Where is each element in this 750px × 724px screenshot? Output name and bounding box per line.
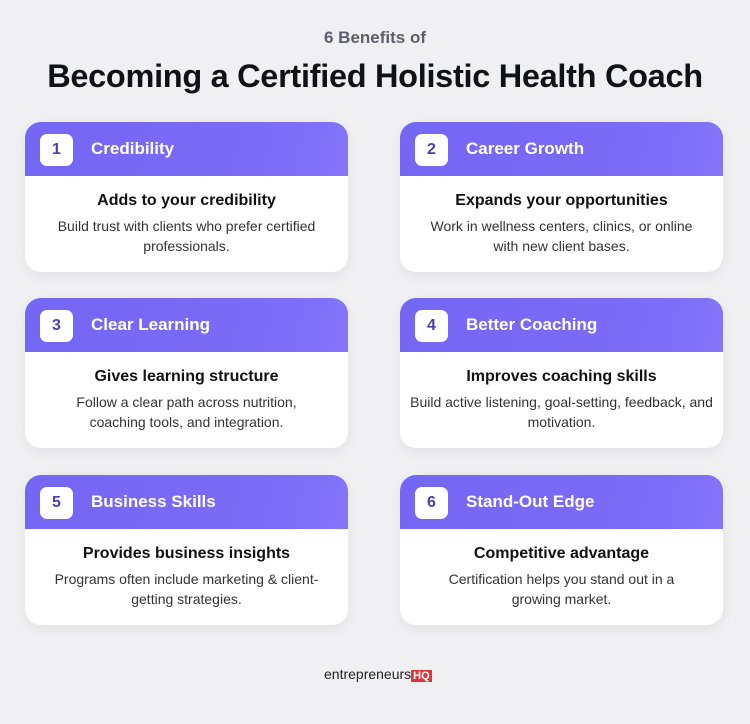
panel: better coaching: 4 xyxy=(427,317,436,334)
title: Becoming a Certified Holistic Health Coach xyxy=(47,58,703,94)
panel: career growth: Work in wellness centers, clinics, or online with new client bases. xyxy=(431,218,692,254)
panel: career growth: Expands your opportunities xyxy=(455,192,668,209)
subtitle: 6 Benefits of xyxy=(324,28,426,47)
panel: business skills xyxy=(25,475,348,625)
panel: business skills: Business Skills xyxy=(91,492,216,511)
panel: credibility: Build trust with clients who prefer certified professionals. xyxy=(58,218,315,254)
panel: credibility: Adds to your credibility xyxy=(97,192,276,209)
panel: better coaching: Better Coaching xyxy=(466,315,597,334)
panel: career growth: 2 xyxy=(427,141,436,158)
panel: stand-out edge xyxy=(400,475,723,625)
panel: stand-out edge: Certification helps you stand out in a growing market. xyxy=(449,571,674,607)
panel: stand-out edge: Competitive advantage xyxy=(474,545,649,562)
panel: stand-out edge: 6 xyxy=(427,494,436,511)
panel: clear learning: Gives learning structure xyxy=(94,368,279,385)
panel: business skills: 5 xyxy=(52,494,61,511)
panel: clear learning xyxy=(25,298,348,448)
panel: career growth xyxy=(400,122,723,272)
logo: entrepreneursHQ xyxy=(324,666,430,682)
panel: credibility: 1 xyxy=(52,141,61,158)
panel: stand-out edge: Stand-Out Edge xyxy=(466,492,594,511)
panel: credibility: Credibility xyxy=(91,139,174,158)
panel: clear learning: Follow a clear path across nutrition, coaching tools, and integration. xyxy=(76,394,297,430)
panel: better coaching: Build active listening, goal-setting, feedback, and motivation. xyxy=(410,394,713,430)
panel: better coaching: Improves coaching skills xyxy=(466,368,657,385)
panel: career growth: Career Growth xyxy=(466,139,584,158)
panel: credibility xyxy=(25,122,348,272)
panel: business skills: Programs often include marketing & client-getting strategies. xyxy=(55,571,318,607)
panel: clear learning: 3 xyxy=(52,317,61,334)
panel: business skills: Provides business insights xyxy=(83,545,290,562)
panel: better coaching xyxy=(400,298,723,448)
panel: clear learning: Clear Learning xyxy=(91,315,210,334)
